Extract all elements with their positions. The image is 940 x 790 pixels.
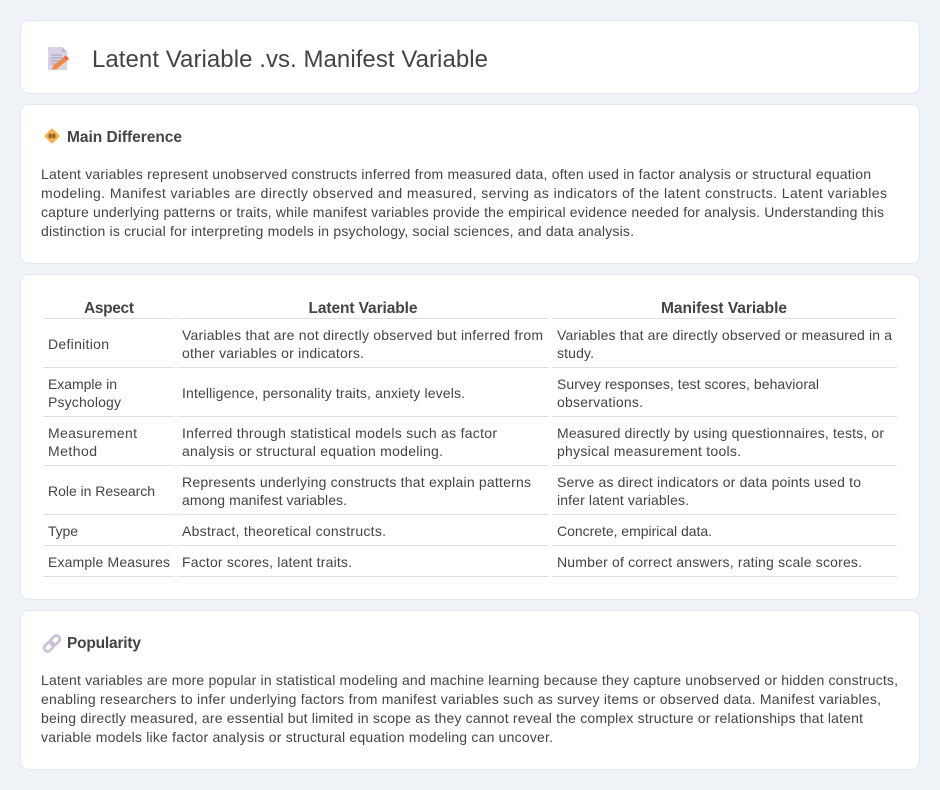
row: definition: Variables that are not directly observed but inferred from: [182, 327, 543, 343]
row: type: Concrete, empirical data.: [557, 523, 712, 539]
row: definition: Variables that are directly observed or measured in a: [557, 327, 892, 343]
text block: popularity: variable models like factor analysis or structural equation modeling can uncover.: [41, 729, 553, 745]
row: example measures: Factor scores, latent traits.: [182, 554, 352, 570]
row: definition: Definition: [48, 336, 109, 352]
row: definition: [48, 327, 892, 361]
text block: main difference: distinction is crucial for interpreting models in psychology, social sciences, and data analysis.: [41, 223, 634, 239]
row: example in psychology: [48, 376, 819, 410]
icon: document with pencil: [48, 47, 69, 70]
table header: Latent Variable: [308, 300, 418, 317]
table header: Aspect: [84, 300, 134, 317]
text block: main difference: Latent variables represent unobserved constructs inferred from measured data, often used in factor analysis or structural equation: [41, 166, 871, 182]
row: role in research: infer latent variables.: [557, 492, 689, 508]
row: measurement method: analysis or structural equation modeling.: [182, 443, 443, 459]
row: example in psychology: Example in: [48, 376, 117, 392]
row: role in research: Serve as direct indicators or data points used to: [557, 474, 861, 490]
table header: Manifest Variable: [661, 300, 787, 317]
row: example in psychology: Survey responses, test scores, behavioral: [557, 376, 819, 392]
row: measurement method: Measurement: [48, 425, 137, 441]
panel: comparison table: [20, 274, 920, 600]
row: role in research: Represents underlying constructs that explain patterns: [182, 474, 531, 490]
heading: main difference: Main Difference: [67, 129, 182, 146]
text block: main difference: capture underlying patterns or traits, while manifest variables provide the empirical evidence needed for analysis. Understanding this: [41, 204, 884, 220]
row: type: Type: [48, 523, 78, 539]
row: role in research: [48, 474, 861, 508]
row: definition: study.: [557, 345, 594, 361]
title: Latent Variable .vs. Manifest Variable: [92, 46, 488, 73]
panel: main difference: [20, 104, 920, 264]
row: type: [48, 523, 712, 539]
heading: popularity: Popularity: [67, 635, 141, 652]
row: measurement method: Method: [48, 443, 97, 459]
row: definition: other variables or indicators.: [182, 345, 364, 361]
row: example in psychology: observations.: [557, 394, 643, 410]
row: example measures: [48, 554, 862, 570]
text block: popularity: [41, 672, 898, 745]
row: measurement method: Inferred through statistical models such as factor: [182, 425, 497, 441]
text block: main difference: [41, 166, 887, 239]
text block: popularity: Latent variables are more popular in statistical modeling and machine learning because they capture unobserved or hidden constructs,: [41, 672, 898, 688]
row: example measures: Example Measures: [48, 554, 170, 570]
panel: header: [20, 20, 920, 94]
text block: main difference: modeling. Manifest variables are directly observed and measured, serving as indicators of the latent constructs. Latent variables: [41, 185, 887, 201]
text block: popularity: being directly measured, are essential but limited in scope as they cannot reveal the complex structure or relationships that latent: [41, 710, 863, 726]
table header: [84, 300, 787, 317]
row: example in psychology: Psychology: [48, 394, 121, 410]
icon: chain link: [43, 634, 61, 653]
icon: warning diamond: [44, 128, 60, 144]
row: measurement method: Measured directly by using questionnaires, tests, or: [557, 425, 884, 441]
text block: popularity: enabling researchers to infer underlying factors from manifest variables such as survey items or observed data. Manifest variables,: [41, 691, 881, 707]
panel: popularity: [20, 610, 920, 770]
row: example in psychology: Intelligence, personality traits, anxiety levels.: [182, 385, 465, 401]
table rules: [43, 318, 897, 577]
row: role in research: among manifest variables.: [182, 492, 347, 508]
row: measurement method: physical measurement tools.: [557, 443, 741, 459]
row: measurement method: [48, 425, 884, 459]
row: role in research: Role in Research: [48, 483, 155, 499]
row: type: Abstract, theoretical constructs.: [182, 523, 386, 539]
row: example measures: Number of correct answers, rating scale scores.: [557, 554, 862, 570]
